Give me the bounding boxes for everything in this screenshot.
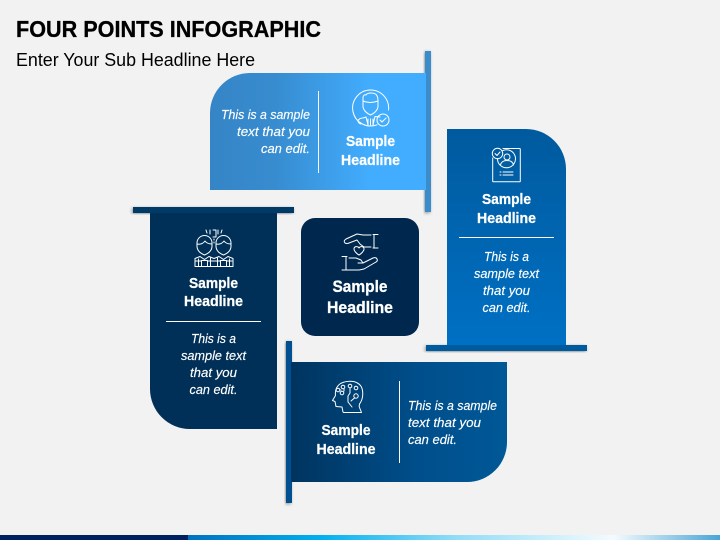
bottom panel body	[291, 362, 507, 482]
left panel text: This is a	[191, 332, 236, 346]
right panel text	[474, 250, 540, 315]
right panel heading	[477, 192, 536, 227]
left panel heading	[184, 276, 243, 310]
top panel heading	[341, 134, 400, 169]
right panel text: can edit.	[482, 301, 530, 315]
icon: hands and heart	[342, 234, 378, 270]
top panel divider	[318, 91, 320, 173]
top panel text: can edit.	[261, 142, 310, 156]
panel: top	[210, 51, 431, 212]
top panel text	[221, 108, 310, 156]
left panel text: sample text	[181, 349, 247, 363]
subtitle: Enter Your Sub Headline Here	[16, 50, 255, 70]
bottom panel text	[408, 399, 497, 447]
panel: centre	[301, 218, 419, 336]
right panel text: This is a	[484, 250, 529, 264]
top panel body	[210, 73, 426, 190]
left panel heading: Sample	[189, 276, 238, 292]
top panel heading: Headline	[341, 153, 400, 169]
bottom panel heading: Headline	[316, 442, 376, 458]
icon: two people	[195, 230, 233, 266]
centre panel body	[301, 218, 419, 336]
top panel text: This is a sample	[221, 108, 310, 122]
left panel divider	[166, 320, 261, 322]
bottom panel bar	[286, 341, 292, 503]
top panel bar	[425, 51, 431, 212]
right panel heading: Sample	[482, 192, 531, 208]
left panel bar	[133, 207, 294, 213]
top panel heading: Sample	[346, 134, 395, 150]
title: FOUR POINTS INFOGRAPHIC	[16, 16, 321, 42]
bottom panel text: This is a sample	[408, 399, 497, 413]
centre panel heading	[327, 278, 393, 317]
icon: profile document	[492, 148, 520, 182]
top panel text: text that you	[237, 125, 310, 139]
bottom panel heading	[316, 423, 376, 458]
right panel divider	[459, 236, 554, 238]
right panel text: that you	[483, 284, 530, 298]
bottom panel text: can edit.	[408, 433, 457, 447]
icon: man with check	[353, 90, 389, 126]
bottom panel heading: Sample	[322, 423, 370, 439]
left panel text: that you	[190, 366, 237, 380]
right panel text: sample text	[474, 267, 540, 281]
panel: left	[133, 207, 294, 429]
left panel text	[181, 332, 247, 397]
centre panel heading: Sample	[332, 278, 388, 296]
footer colour bar	[0, 535, 720, 540]
left panel text: can edit.	[190, 383, 238, 397]
right panel bar	[426, 345, 587, 351]
icon: head with circuit brain	[332, 381, 363, 412]
right panel heading: Headline	[477, 211, 536, 227]
panel: bottom	[286, 341, 507, 503]
bottom panel text: text that you	[408, 416, 481, 430]
left panel body	[150, 213, 277, 429]
centre panel heading: Headline	[327, 299, 393, 317]
right panel body	[447, 129, 566, 345]
left panel heading: Headline	[184, 294, 243, 310]
panel: right	[426, 129, 587, 351]
bottom panel divider	[398, 381, 400, 463]
